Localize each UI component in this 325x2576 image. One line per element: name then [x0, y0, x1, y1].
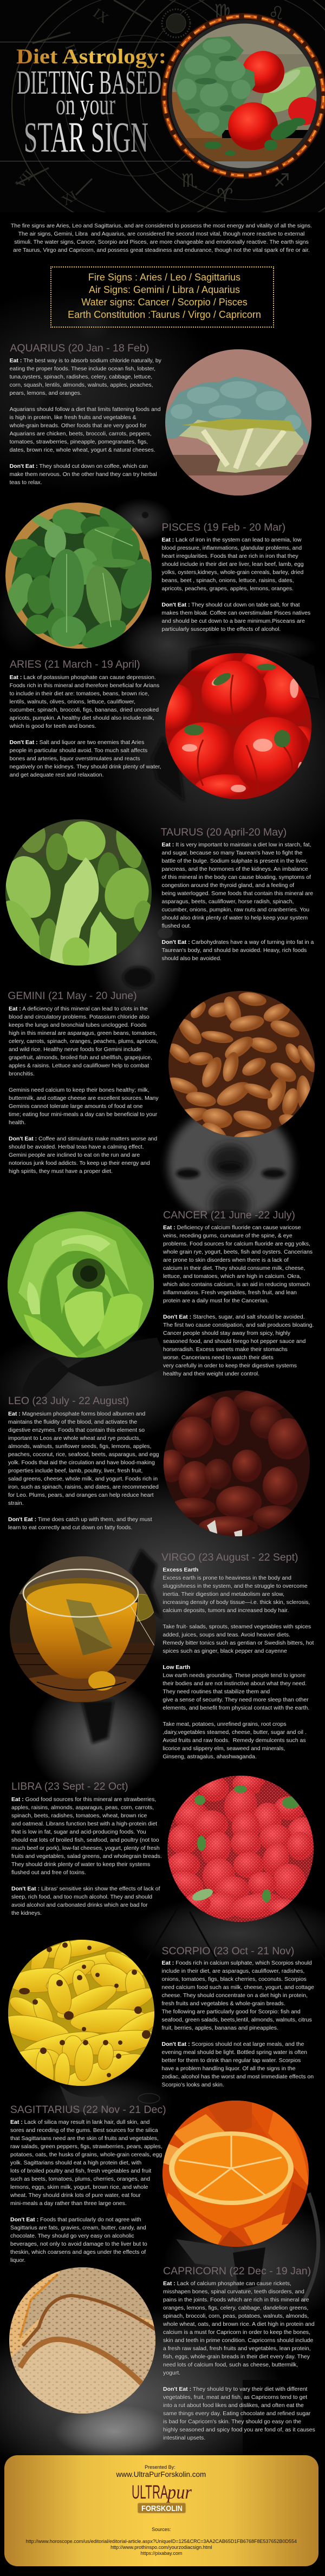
hero banner [0, 0, 325, 212]
body text: same things every day. Eating chocolate and refined sugar [163, 2410, 310, 2417]
intro text: stimuli. The water signs, Cancer, Scorpio and Pisces, are more changeable and emotionally reactive. The earth signs [14, 239, 309, 245]
body text: licorice and slippery elm, seaweed and minerals, [162, 1745, 285, 1752]
body text: Take fruit- salads, sprouts, steamed vegetables with spices [162, 1623, 311, 1630]
body text: Ginseng, astragalus, ahashwaganda. [162, 1753, 257, 1760]
body text: raw salads, green peppers, figs, strawberries, pears, apples, [10, 2143, 162, 2150]
photo: herbal tea [10, 1556, 156, 1703]
body text: fresh fruits and vegetables & whole-grain breads. [161, 2000, 285, 2007]
body text: notorious junk food addicts. To keep up their energy and [9, 1160, 150, 1166]
silhouette: scales [130, 1895, 325, 1971]
body text: salad greens, cheese, whole milk, and yogurt. Foods rich in [8, 1475, 158, 1482]
body text: onions, tomatoes, figs, black cherries, coconuts. Scorpios [161, 1975, 307, 1982]
body text: whole grain rye, yogurt, beets, fish and oysters. Cancerians [163, 1249, 313, 1255]
body text: digestive enzymes. Foods that contain this element so [8, 1426, 145, 1433]
body text: lettuce, and tomatoes, which are high in calcium. Okra, [163, 1273, 301, 1280]
panel: Aries [10, 653, 311, 799]
callout: element groups: Earth Constitution :Taurus / Virgo / Capricorn [68, 309, 261, 320]
body text: Taurean's body, and should be avoided. Heavy, rich foods [161, 947, 307, 954]
body text: such as beets, tomatoes, plums, cherries, oranges, and [10, 2176, 150, 2182]
body text: intestinal upsets. [163, 2435, 205, 2441]
panel: Capricorn [9, 2265, 315, 2441]
intro text: The fire signs are Aries, Leo and Sagittarius, and are considered to possess the most energy and vitality of all the signs. [11, 223, 312, 229]
body text: calcium deposits, tumors and increased body hair. [162, 1607, 289, 1614]
body text [161, 842, 314, 962]
panel: Libra [11, 1776, 314, 1922]
body text: health. [9, 1119, 26, 1126]
body text: Eat : Lack of iron in the system can lead to anemia, low [161, 537, 301, 543]
body text: learn to eat correctly and cut down on fatty foods. [8, 1524, 132, 1530]
hero background: astrological clock rings: VII [12, 167, 37, 192]
body text: highly seasoned and spicy food you are fond of, as it causes [163, 2427, 315, 2433]
body text: is high in protein, like fresh fruits and vegetables & [10, 414, 136, 421]
body text: Low earth needs grounding. These people tend to ignore [162, 1672, 306, 1679]
body text: blood and circulatory problems. Potassium chloride also [9, 1014, 150, 1020]
body text: fruits and vegetables, salad greens, and wholegrain breads. [11, 1853, 162, 1860]
heading: PISCES (19 Feb - 20 Mar) [161, 521, 285, 533]
body text: Don't Eat : Foods that particularly do not agree with [10, 2216, 141, 2223]
panel: Sagittarius [10, 2101, 309, 2264]
photo: broccoli [165, 349, 311, 495]
body text: should also be avoided. [161, 955, 222, 962]
intro text [11, 223, 312, 253]
body text: They need routines that stabilize them and [162, 1688, 270, 1695]
body text: maintains the fluidity of the blood, and activates the [8, 1419, 137, 1425]
photo: strawberries [167, 1776, 314, 1922]
silhouette: archer [162, 2193, 325, 2329]
body text [162, 2280, 315, 2441]
body text: Excess earth is prone to heaviness in the body and [162, 1575, 291, 1581]
body text: yolk. Sagittarians should eat a high protein diet, with [10, 2160, 141, 2166]
hero title: DIETING BASED [17, 64, 161, 101]
body text: healthy and their weight under control. [163, 1371, 259, 1377]
body text: Remedy bitter tonics such as gentian or Swedish bitters, hot [162, 1640, 314, 1646]
body text: Eat : Lack of calcium phosphate can cause rickets, [163, 2280, 291, 2287]
body text: calcium in their diet. They should consume milk, cheese, [163, 1265, 305, 1271]
heading: CAPRICORN (22 Dec - 19 Jan) [163, 2265, 311, 2277]
body text: Aquarians should follow a diet that limits fattening foods and [10, 406, 161, 413]
body text: peaches, coconut, rice, seafood, beets, asparagus, and egg [8, 1451, 159, 1458]
callout: element groups: Fire Signs : Aries / Leo / Sagittarius [88, 272, 240, 283]
body text: Geminis cannot tolerate large amounts of food at one [9, 1103, 142, 1110]
body text: should also drink plenty of water to help keep your system [161, 915, 308, 921]
body text [162, 1567, 314, 1760]
silhouette: scorpion [32, 2074, 173, 2128]
photo: tomatoes [165, 653, 311, 799]
body text: negatively on the kidneys. They should drink plenty of water, [10, 764, 161, 770]
silhouette: bull [92, 883, 184, 1023]
body text: increasing density of body tissue—i.e. thick skin, sclerosis, [162, 1599, 310, 1606]
body text: spinach, beets, radishes, tomatoes, wheat, brown rice [11, 1812, 147, 1819]
source links: http://www.prothinspo.com/yourzodiacsign.html [110, 2545, 212, 2550]
body text: have a problem handling liquor. Of all the signs in the [161, 2065, 295, 2072]
hero background: astrological clock rings: XI [58, 187, 80, 208]
body text: important to Leos are whole wheat and rye products, [8, 1435, 141, 1442]
body text: much beef or pork), low-fat cheeses, yogurt, plenty of fresh [11, 1845, 160, 1851]
footer panel [4, 2455, 318, 2566]
body text: Don't Eat : Salt and liquor are two enemies that Aries [10, 739, 144, 745]
body text: Don't Eat : Starches, sugar, and salt should be avoided. [163, 1314, 305, 1320]
body text: Excess Earth [162, 1567, 198, 1573]
body text: for Leo. Plums, pears, and oranges can help reduce heart [8, 1491, 154, 1498]
body text: fish, eggs, whole-grain breads in their diet every day. They [163, 2353, 310, 2360]
body text: almonds, walnuts, sunflower seeds, figs, lemons, apples, [8, 1443, 151, 1449]
callout: element groups [50, 266, 274, 327]
body text: lemons, eggs, skim milk, yogurt, brown rice, and whole [10, 2184, 148, 2190]
body text: pancreas, and the hormones of the kidneys. An imbalance [161, 866, 308, 872]
body text: particularly susceptible to the effects of alcohol. [161, 626, 281, 632]
body text: people in particular should avoid. Too much salt affects [10, 747, 147, 754]
heading: AQUARIUS (20 Jan - 18 Feb) [10, 342, 149, 354]
body text: whole wheat, oats, and brown rice. A diet high in protein and [163, 2321, 315, 2327]
silhouette: goat nebula [0, 2307, 325, 2491]
body text: their bodies and are not instinctive about what they need. [162, 1680, 307, 1687]
body text: sluggishness in the system, and the struggle to overcome [162, 1583, 308, 1589]
body text: apricots, pumpkin. A healthy diet should also include milk, [10, 715, 154, 721]
intro text: are Taurus, Virgo and Capricorn, and possess great steadiness and endurance, though not the vital spark of fire or air. [13, 247, 310, 253]
panel: Aquarius [10, 342, 311, 495]
body text: Don't Eat : Carbohydrates have a way of turning into fat in a [161, 939, 314, 945]
logo: UltraPur Forskolin: FORSKOLIN [141, 2504, 183, 2513]
body text: Don't Eat : Time does catch up with them, and they must [8, 1516, 152, 1523]
body text: Don't Eat : They should cut down on table salt, for that [161, 602, 300, 608]
body text: seasoned food, and should forego hot pepper sauce and [163, 1338, 306, 1345]
body text: fruit, berries, apples, bananas and pineapples. [161, 2024, 278, 2031]
body text: veins, receding gums, curvature of the spine, & eye [163, 1232, 292, 1239]
body text: avoid alcohol and carbonated drinks which are bad for [11, 1902, 148, 1908]
body text: are prone to skin disorders when there is a lack of [163, 1257, 289, 1263]
body text: Eat : Magnesium phosphate forms blood albumen and [8, 1410, 145, 1417]
body text [10, 2119, 162, 2264]
body text [10, 357, 161, 486]
silhouette: crab [0, 1327, 200, 1446]
body text: eating the proper foods. These include ocean fish, lobster, [10, 366, 155, 372]
hero title: on your [56, 88, 115, 121]
photo: bread [9, 2267, 155, 2414]
body text: Gemini people are inclined to eat on the run and are [9, 1152, 140, 1158]
body text: flushed out. [161, 923, 191, 929]
body text: Eat : It is very important to maintain a diet low in starch, fat, [161, 842, 311, 848]
hero title: Diet Astrology: [16, 45, 166, 68]
silhouette: woman's face [168, 1107, 292, 1223]
sources: Sources: [152, 2527, 171, 2532]
body text [10, 674, 161, 778]
body text: skin and teeth in prime condition. Capricorns should include [163, 2337, 313, 2344]
body text: yolk. Foods that aid the circulation and have blood-making [8, 1459, 155, 1465]
body text: beverages, not only to avoid damage to the liver but to [10, 2241, 147, 2247]
body text: Sagittarius are fats, gravies, cream, butter, candy, and [10, 2225, 146, 2231]
body text: buttermilk, and cottage cheese are excellent sources. Many [9, 1095, 159, 1101]
hero title [16, 45, 166, 161]
body text: protein are a daily must for the Cancerian. [163, 1297, 269, 1304]
fire ring [164, 16, 323, 175]
body text: and should be cut down to a bare minimum.Pisceans are [161, 618, 305, 624]
body text: chocolate. They should go very easy on alcoholic [10, 2233, 134, 2239]
body text: misshapen bones, spinal curvature, teeth disorders, and [163, 2288, 304, 2295]
body text [163, 1224, 314, 1377]
body text: give a sense of security. They need more sleep than other [162, 1697, 309, 1703]
panel: Cancer [8, 1209, 314, 1377]
body text: Eat : Lack of potassium phosphate can cause depression. [10, 674, 156, 680]
body text: flushed out and free of toxins. [11, 1869, 86, 1876]
silhouette: virgin statue [30, 1676, 165, 1801]
body text: time; eating four mini-meals a day can be beneficial to your [9, 1111, 157, 1118]
hero photo ring [170, 22, 318, 170]
body text: wheat. They should drink lots of pure water, eat four [10, 2192, 141, 2199]
body text: theskin, which coarsens and ages under the effects of [10, 2249, 146, 2255]
panel: Gemini [8, 990, 315, 1175]
hero rules [0, 42, 191, 161]
body text: pears, lemons, and oranges. [10, 390, 82, 396]
heading: VIRGO (23 August - 22 Sept) [161, 1551, 298, 1563]
hero title: STAR SIGN [24, 114, 148, 161]
body text: spices such as ginger, black pepper and cayenne [162, 1648, 287, 1654]
photo: raisins [164, 1390, 310, 1536]
body text: the kidneys. [11, 1910, 42, 1916]
body text: cheese. They should concentrate on a diet high in protein, [161, 1992, 308, 1998]
body text: bones and arteries, liquor overstimulates and reacts [10, 755, 140, 761]
panel: Taurus [5, 819, 314, 966]
body text: strain. [8, 1500, 24, 1507]
body text: dates, brown rice, whole wheat, yogurt & natural cheeses. [10, 447, 155, 453]
body text [161, 1959, 314, 2088]
body text: Don't Eat : Coffee and stimulants make matters worse and [9, 1136, 157, 1142]
body text: Take meat, potatoes, unrefined grains, root crops [162, 1721, 287, 1727]
photo: oranges [162, 2101, 309, 2247]
body text: and oatmeal. Librans function best with a high-protein diet [11, 1821, 157, 1827]
callout: element groups: Water signs: Cancer / Scorpio / Pisces [81, 297, 248, 308]
body text: should eat lots of broiled fish, seafood, and poultry (not too [11, 1837, 159, 1843]
photo: lettuce [8, 1211, 154, 1358]
body text: sleep, rich food, and too much alcohol. They and should [11, 1894, 152, 1900]
body text: Don't Eat : Scorpios should not eat large meals, and the [161, 2040, 304, 2047]
body text: spinach, broccoli, corn, peas, potatoes, walnuts, almonds, [163, 2313, 309, 2319]
body text: yogurt. [163, 2370, 180, 2376]
heading: ARIES (21 March - 19 April) [10, 658, 140, 670]
body text: evening meal should be light. Bottled spring water is often [161, 2049, 307, 2056]
body text: better for them to drink than regular tap water. Scorpios [161, 2057, 301, 2063]
hero background: astrological clock rings: ♌ [268, 3, 284, 24]
body text: lots of broiled poultry and fish, fresh vegetables and fruit [10, 2168, 151, 2174]
body text: teas to relax. [10, 479, 42, 486]
body text: a fresh raw salad, fresh fruits and vegetables, lean protein, [163, 2345, 311, 2352]
panel: Pisces [5, 503, 310, 649]
body text: yolks, oysters,kidneys, whole-grain cereals, barley, dried [161, 569, 303, 576]
silhouette: lion [32, 1476, 314, 1665]
body text: cucumber, spinach, broccoli, figs, bananas, dried uncooked [10, 706, 159, 713]
source links: https://pixabay.com [140, 2551, 182, 2556]
body text: cucumber, onions, pumpkin, raw nuts and cranberries. You [161, 907, 309, 913]
body text: should be avoided. Herbal teas have a calming effect. [9, 1144, 144, 1150]
body text: properties include beef, lamb, poultry, liver, fresh fruit, [8, 1468, 142, 1474]
hero background: astrological clock rings: IX [90, 5, 112, 27]
body text: The first two cause constipation, and salt produces bloating. [163, 1322, 314, 1328]
body text: tomatoes, strawberries, pineapple, pomegranates, figs, [10, 439, 148, 445]
body text: vegetables, fruit, meat and fish, as Capricorns tend to get [163, 2394, 307, 2401]
body text: seafood, green salads, beets,lentil, almonds, walnuts, citrus [161, 2017, 312, 2023]
body text: worse. Cancerians need to watch their diets [163, 1354, 274, 1361]
body text: being waterlogged. Some foods that contain this mineral are [161, 890, 313, 897]
body text: Avoid fruits and raw foods. Remedy demulcents such as [162, 1737, 306, 1744]
body text: high spirits, they must have a proper diet. [9, 1168, 113, 1175]
body text: asparagus, beets, cauliflower, horse radish, spinach, [161, 898, 294, 905]
body text: zodiac, alcohol has the worst and most immediate effects on [161, 2073, 314, 2079]
heading: LEO (23 July - 22 August) [8, 1395, 129, 1407]
body text: make them nervous. On the other hand they can try herbal [10, 471, 157, 478]
body text: apricots, peaches, grapes, apples, lemons, oranges. [161, 585, 294, 592]
body text: and get adequate rest and relaxation. [10, 771, 104, 778]
body text: calcium is a must for Capricorn in order to keep the bones, [163, 2329, 310, 2336]
body text: pains in the joints. Foods which are rich in this mineral are [163, 2297, 309, 2303]
photo: spinach [5, 503, 152, 649]
body text: congestion around the thyroid gland, and a feeling of [161, 882, 294, 889]
presented by: Presented By: [145, 2464, 176, 2470]
body text: should include in their diet are liver, lean beef, lamb, egg [161, 561, 304, 568]
body text: Don't Eat : Libras' sensitive skin show the effects of lack of [11, 1886, 160, 1892]
body text: Cancer people should stay away from spicy, highly [163, 1330, 290, 1336]
body text: Eat : Good food sources for this mineral are strawberries, [11, 1796, 156, 1803]
logo: UltraPur Forskolin [132, 2484, 192, 2514]
heading: LIBRA (23 Sept - 22 Oct) [11, 1781, 128, 1792]
body text: makes them bloat. Coffee can overstimulate Pisces natives [161, 610, 310, 616]
body text: keeps the lungs and bronchial tubes unclogged. Foods [9, 1022, 147, 1028]
source links [26, 2539, 297, 2556]
body text: oranges, lemons, figs, celery, cabbage, dandelion greens, [163, 2305, 308, 2311]
body text: liquor. [10, 2257, 25, 2264]
body text: potatoes, oats, the husks of grains, whole-grain cereals, egg [10, 2151, 162, 2158]
silhouette: ram [92, 636, 325, 869]
body text: ,dairy,vegetables steamed, cheese, butter, sugar and oil . [162, 1729, 307, 1736]
heading: SCORPIO (23 Oct - 21 Nov) [161, 1945, 294, 1957]
body text: which is good for teeth and bones. [10, 722, 96, 729]
heading: SAGITTARIUS (22 Nov - 21 Dec) [10, 2104, 166, 2116]
body text: problems. Food sources for calcium fluoride are egg yolks, [163, 1241, 310, 1247]
body text: Eat : Lack of silica may result in lank hair, dull skin, and [10, 2119, 150, 2125]
heading: GEMINI (21 May - 20 June) [8, 990, 137, 1002]
body text: elements, and benefit from physical contact with the earth. [162, 1705, 309, 1711]
photo: almonds [168, 991, 315, 1137]
body text: grapefruit, almonds, broiled fish and shellfish, grapejuice, [9, 1054, 152, 1061]
body text: and sugar, because so many Taurean's have to fight the [161, 850, 302, 856]
hero food photo: vegetables [172, 24, 316, 168]
body text: Low Earth [162, 1664, 190, 1671]
body text: that Sagittarians need are the skin of fruits and vegetables, [10, 2135, 159, 2142]
body text: Aquarians are chicken, beets, broccoli, carrots, peppers, [10, 431, 152, 437]
callout: element groups: Air Signs: Gemini / Libra / Aquarius [89, 284, 240, 295]
body text: inertia. Their digestion and metabolism are slow, [162, 1591, 284, 1597]
body text: whole-grain breads. Other foods that are very good for [10, 422, 146, 429]
body text: The following are particularly good for Scorpio: fish and [161, 2008, 301, 2014]
body text: battle of the bulge. Sodium sulphate is present in the liver, [161, 858, 308, 864]
website: www.UltraPurForskolin.com [116, 2470, 206, 2479]
body text: to include in their diet are: tomatoes, beans, brown rice, [10, 690, 150, 696]
body text: Foods rich in this mineral and therefore beneficial for Arians [10, 682, 159, 689]
body text: apples, raisins, almonds, asparagus, peas, corn, carrots, [11, 1804, 154, 1811]
photo: bananas [8, 1940, 154, 2086]
body text: of this mineral in the body can cause bloating, symptoms of [161, 874, 311, 881]
body text: need lots of calcium food, such as cheese, buttermilk, [163, 2362, 298, 2368]
panel: Virgo [10, 1551, 314, 1760]
body text: Eat : Foods rich in calcium sulphate, which Scorpios should [161, 1959, 312, 1966]
body text: tuna,oysters, spinach, radishes, celery, cabbage, lettuce, [10, 374, 152, 380]
body text: Eat : The best way is to absorb sodium chloride naturally, by [10, 357, 161, 364]
source links: http://www.horoscope.com/us/editorial/editorial-article.aspx?UniqueID=125&CRC=3AA2CAB65D1FB6768F8E537652B0D554 [26, 2539, 297, 2544]
hero background: astrological clock rings [0, 0, 325, 234]
body text: that is low in fat, sugar and acid-producing foods. You [11, 1829, 146, 1835]
hero background: astrological clock rings: ♏ [181, 170, 198, 192]
body text: Eat : Deficiency of calcium fluoride can cause varicose [163, 1224, 301, 1231]
silhouette: water bearer [0, 287, 222, 493]
body text: inflammations. Fresh vegetables, fresh fruit, and lean [163, 1289, 297, 1296]
photo: asparagus [5, 819, 152, 966]
body text: iron, such as spinach, raisins, and dates, are recommended [8, 1484, 159, 1490]
body text: blood pressure, inflammations, glandular problems, and [161, 545, 302, 551]
hero background: astrological clock rings: III [62, 42, 82, 60]
heading: TAURUS (20 April-20 May) [161, 826, 287, 838]
body text: and wild rice. Healthy nerve foods for Gemini include [9, 1046, 141, 1053]
body text: need calcium food such as milk, cheese, yogurt, and cottage [161, 1984, 314, 1991]
body text: very carefully in order to keep their digestive systems [163, 1362, 297, 1369]
body text [11, 1796, 162, 1916]
body text: Don't Eat : They should try to vary their diet with different [163, 2386, 307, 2392]
body text: beans, beet , spinach, onions, lettuce, raisins, dates, [161, 577, 294, 584]
hero background: astrological clock rings: ♐ [274, 170, 290, 192]
body text: apples & raisins. Lettuce and cauliflower help to combat [9, 1062, 149, 1069]
body text [9, 1006, 159, 1175]
silhouette: fish [0, 498, 320, 677]
body text: Geminis need calcium to keep their bones healthy; milk, [9, 1087, 150, 1093]
body text: is bad for Capricorn's skin. They should go easy on the [163, 2418, 301, 2425]
body text: include in their diet, are asparagus, cauliflower, radishes, [161, 1968, 304, 1974]
body text: Scorpio's looks and skin. [161, 2082, 224, 2088]
body text: They should drink plenty of water to keep their systems [11, 1861, 150, 1868]
body text: Eat : A deficiency of this mineral can lead to clots in the [9, 1006, 148, 1012]
body text: bronchitis. [9, 1071, 35, 1077]
heading: CANCER (21 June -22 July) [163, 1209, 295, 1221]
body text: into a rut about food likes and dislikes, and often eat the [163, 2402, 304, 2409]
body text: horseradish. Excess sweets make their stomachs [163, 1346, 288, 1353]
body text: which also contains calcium, is an aid in reducing stomach [163, 1281, 310, 1288]
body text: Don't Eat : They should cut down on coffee, which can [10, 463, 148, 469]
hero background: astrological clock rings: ♍ [214, 1, 230, 22]
body text: high in this mineral are asparagus, green beans, tomatoes, [9, 1030, 157, 1036]
body text: celery, carrots, spinach, oranges, peaches, plums, apricots, [9, 1038, 158, 1045]
body text: lentils, walnuts, olives, onions, lettuce, cauliflower, [10, 699, 135, 705]
hero background: astrological clock rings: ♈ [217, 185, 233, 206]
body text: added, juices, soups and teas. Avoid heavier diets. [162, 1632, 290, 1638]
body text: heart irregularities. Foods that are rich in iron that they [161, 553, 298, 559]
body text: corn, squash, lentils, almonds, walnuts, apples, peaches, [10, 382, 153, 388]
body text [8, 1410, 159, 1530]
panel: Leo [8, 1390, 310, 1536]
intro text: The air signs, Gemini, Libra and Aquarius, are considered the second most vital, though more reactive to external [18, 231, 304, 237]
body text [161, 537, 310, 632]
panel: Scorpio [8, 1940, 314, 2088]
body text: sores and receding of the gums. Best sources for the silica [10, 2127, 158, 2134]
body text: mini-meals a day rather than three large ones. [10, 2200, 127, 2207]
